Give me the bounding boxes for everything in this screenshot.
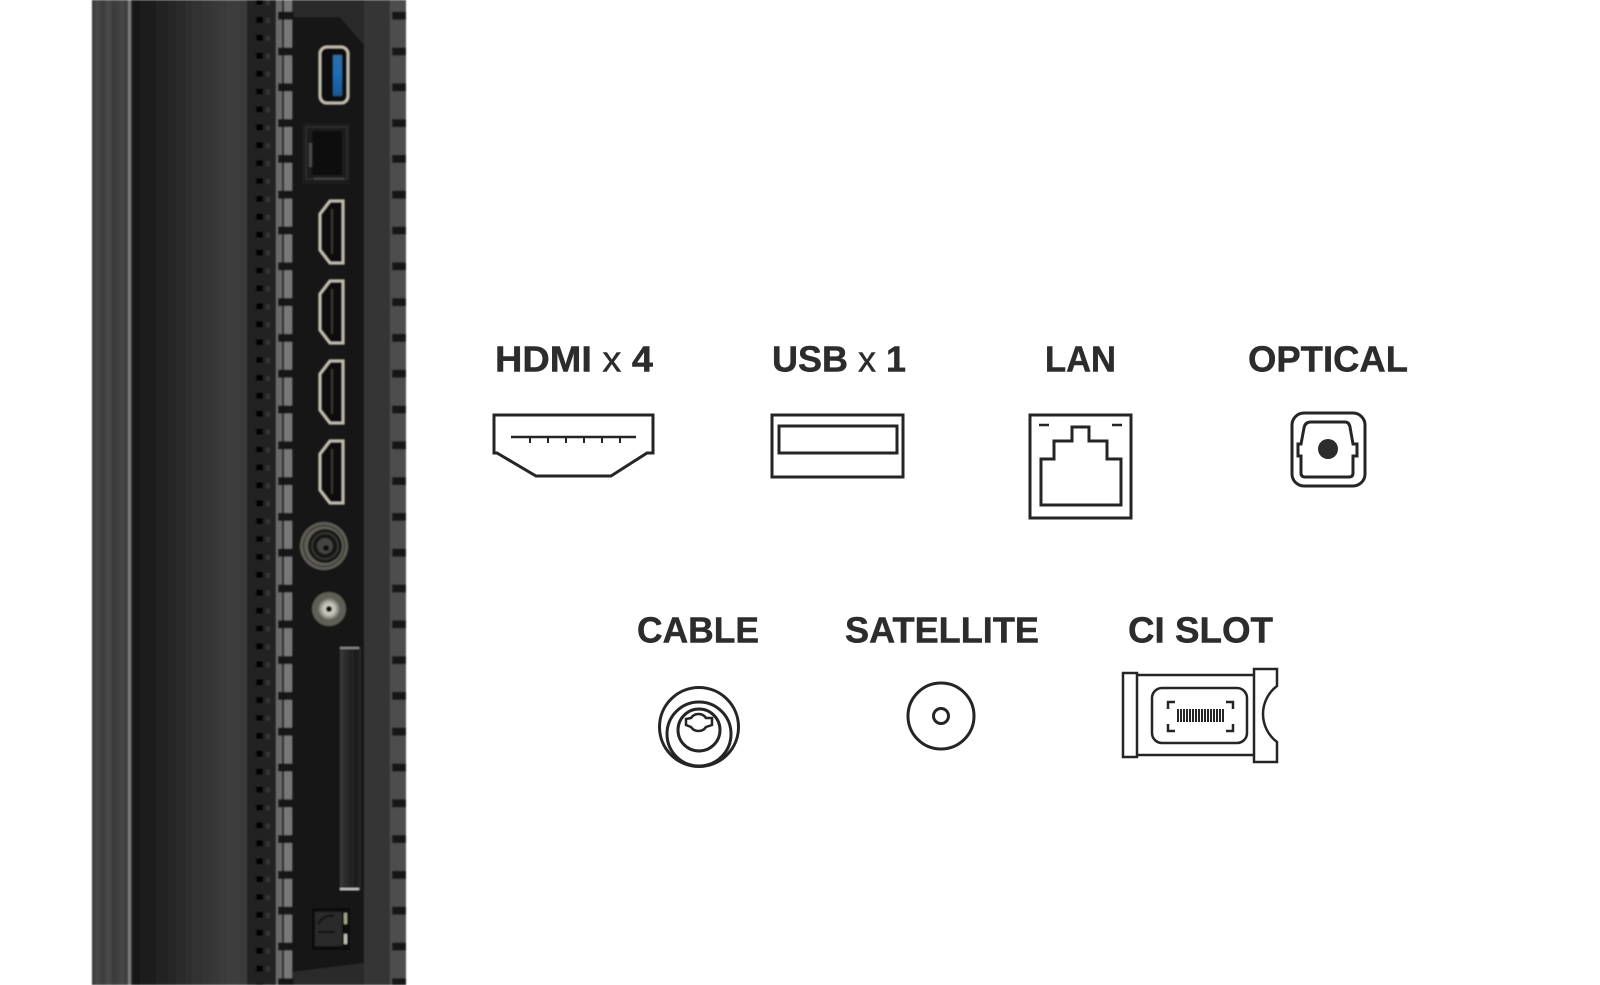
connector: CABLE (637, 610, 759, 766)
port: CI slot (340, 647, 361, 890)
heading: CI SLOT: CI SLOT (1128, 610, 1273, 650)
icon: SATELLITE (908, 683, 974, 749)
port: optical (312, 908, 350, 950)
connector: HDMI x 4 (494, 338, 653, 476)
perforated vent strip (240, 0, 280, 985)
port: cable (300, 522, 348, 570)
heading: HDMI x 4: HDMI x 4 (495, 338, 653, 380)
port: HDMI 3 (320, 361, 343, 423)
TV bezel edge (92, 0, 129, 985)
panel: TV rear photo (92, 0, 406, 985)
connector: CI SLOT (1123, 610, 1277, 762)
heading: USB x 1: USB x 1 (772, 338, 906, 380)
port: HDMI 4 (320, 441, 343, 503)
icon: CABLE (660, 688, 738, 766)
right side strip (364, 0, 406, 985)
icon: USB (772, 415, 903, 477)
connector: SATELLITE (845, 610, 1039, 749)
icon: OPTICAL (1292, 413, 1365, 486)
icon: CI SLOT (1123, 669, 1277, 762)
connector: USB x 1 (772, 338, 906, 477)
port: HDMI 1 (320, 201, 343, 263)
connector plate (292, 17, 364, 972)
port: satellite (312, 592, 346, 626)
port: USB (320, 47, 348, 103)
icon: LAN (1030, 415, 1131, 518)
connector: OPTICAL (1248, 338, 1408, 486)
connector: LAN (1030, 338, 1131, 518)
port: HDMI 2 (320, 281, 343, 343)
heading: OPTICAL: OPTICAL (1248, 338, 1408, 380)
metal rail (276, 0, 294, 985)
heading: CABLE: CABLE (637, 610, 759, 650)
heading: LAN: LAN (1045, 338, 1116, 380)
heading: SATELLITE: SATELLITE (845, 610, 1039, 650)
TV back surface (134, 0, 247, 985)
icon: HDMI (494, 415, 653, 476)
port: LAN (302, 123, 350, 184)
